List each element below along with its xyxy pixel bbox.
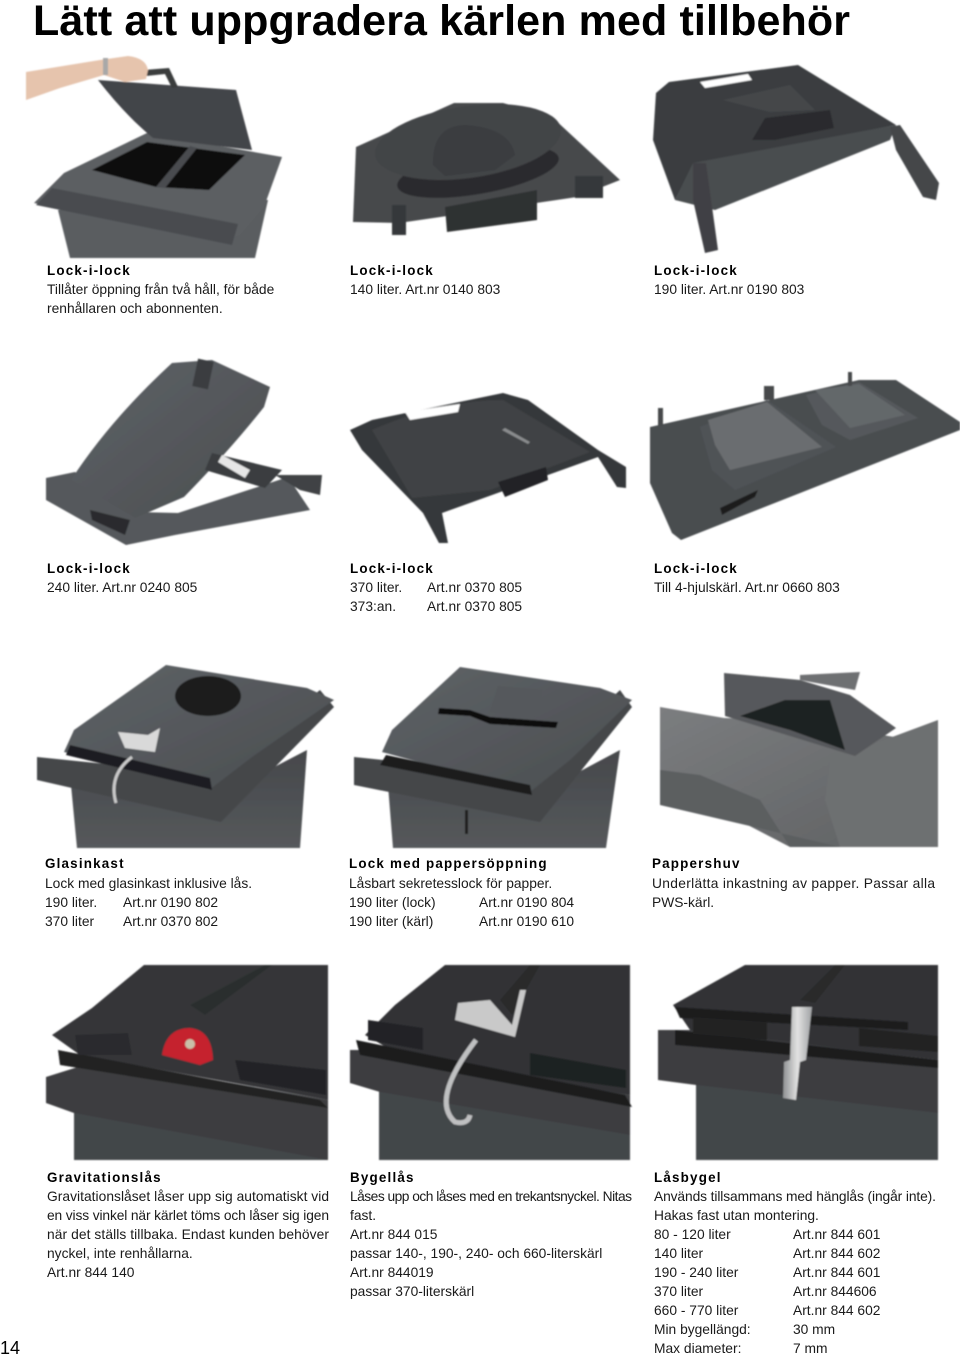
description: en viss vinkel när kärlet töms och låser sig igen: [47, 1208, 329, 1223]
description: 80 - 120 liter: [654, 1227, 731, 1242]
panel: Lock-i-lock 190 liter: [653, 65, 939, 297]
article numbers: Art.nr 0370 805: [427, 599, 522, 614]
description: 190 liter (kärl): [349, 914, 433, 929]
description: 190 liter.: [45, 895, 97, 910]
description: Tillåter öppning från två håll, för både: [47, 282, 275, 297]
description: passar 140-, 190-, 240- och 660-literskärl: [350, 1246, 602, 1261]
description: [350, 1189, 632, 1299]
heading: Lock-i-lock: [350, 263, 434, 278]
panel: Bygellås: [350, 965, 632, 1299]
description: Art.nr 0190 804: [479, 895, 574, 910]
photo: bin with glass inlet: [37, 665, 334, 848]
description: Art.nr 844 015: [350, 1227, 438, 1242]
description: nyckel, inte renhållarna.: [47, 1246, 193, 1261]
description: Art.nr 844 602: [793, 1246, 880, 1261]
heading: Gravitationslås: [47, 1170, 162, 1185]
article numbers: Art.nr 0370 805: [427, 580, 522, 595]
article number: 140 liter. Art.nr 0140 803: [350, 282, 501, 297]
description: Lock med glasinkast inklusive lås.: [45, 876, 252, 891]
description: 660 - 770 liter: [654, 1303, 739, 1318]
panel: Lock-i-lock two-way opening: [26, 56, 282, 316]
description: [654, 1189, 936, 1355]
photo: 140 liter lid: [353, 93, 620, 235]
description: 370 liter: [654, 1284, 703, 1299]
description: [349, 876, 574, 929]
photo: bin with shackle lock: [350, 965, 632, 1160]
description: [652, 876, 935, 910]
description: Art.nr 844 140: [47, 1265, 135, 1280]
heading: Låsbygel: [654, 1170, 722, 1185]
panel: Lock med pappersöppning: [349, 667, 632, 929]
description: 370 liter: [45, 914, 94, 929]
heading: Lock-i-lock: [47, 263, 131, 278]
panel: Låsbygel: [654, 965, 938, 1355]
heading: Lock-i-lock: [350, 561, 434, 576]
description: Hakas fast utan montering.: [654, 1208, 819, 1223]
panel: Lock-i-lock 240 liter: [46, 359, 322, 595]
photo: bin with open lid and arm: [26, 56, 282, 258]
description: 140 liter: [654, 1246, 703, 1261]
panel: Gravitationslås: [46, 965, 329, 1280]
description: Gravitationslåset låser upp sig automatiskt vid: [47, 1189, 329, 1204]
description: Används tillsammans med hänglås (ingår inte).: [654, 1189, 936, 1204]
description: 190 - 240 liter: [654, 1265, 739, 1280]
photo: paper hood: [660, 672, 938, 847]
description: Art.nr 844 602: [793, 1303, 880, 1318]
heading: Lock-i-lock: [654, 561, 738, 576]
description: [47, 282, 275, 316]
description: Underlätta inkastning av papper. Passar alla: [652, 876, 935, 891]
photo: four-wheel bin lid: [650, 372, 960, 540]
article numbers: 373:an.: [350, 599, 396, 614]
article number: 190 liter. Art.nr 0190 803: [654, 282, 805, 297]
photo: 190 liter lid: [653, 65, 939, 253]
photo: 240 liter lid, open: [46, 359, 322, 545]
photo: bin with red gravity lock: [46, 965, 328, 1160]
panel: Pappershuv: [652, 672, 938, 910]
description: Art.nr 844 601: [793, 1265, 880, 1280]
description: Art.nr 0190 610: [479, 914, 574, 929]
article numbers: [350, 580, 522, 614]
panel: Lock-i-lock 140 liter: [350, 93, 620, 297]
panel: Glasinkast: [37, 665, 334, 929]
description: Art.nr 844 601: [793, 1227, 880, 1242]
description: när det ställs tillbaka. Endast kunden behöver: [47, 1227, 329, 1242]
description: Art.nr 844606: [793, 1284, 877, 1299]
description: [47, 1189, 329, 1280]
description: 190 liter (lock): [349, 895, 436, 910]
panel: Lock-i-lock 4-wheel: [650, 372, 960, 595]
description: Min bygellängd:: [654, 1322, 751, 1337]
description: fast.: [350, 1208, 376, 1223]
panel: Lock-i-lock 370 liter: [350, 393, 626, 614]
heading: Lock-i-lock: [47, 561, 131, 576]
description: Art.nr 0190 802: [123, 895, 218, 910]
description: [45, 876, 252, 929]
photo: bin with lock bracket: [658, 965, 938, 1160]
photo: 370 liter lid: [350, 393, 626, 543]
heading: Lock med pappersöppning: [349, 856, 548, 871]
description: Art.nr 844019: [350, 1265, 434, 1280]
heading: Bygellås: [350, 1170, 415, 1185]
heading: Lock-i-lock: [654, 263, 738, 278]
description: PWS-kärl.: [652, 895, 714, 910]
article number: 240 liter. Art.nr 0240 805: [47, 580, 198, 595]
description: Låses upp och låses med en trekantsnyckel. Nitas: [350, 1189, 632, 1204]
heading: Glasinkast: [45, 856, 125, 871]
description: Låsbart sekretesslock för papper.: [349, 876, 552, 891]
article numbers: 370 liter.: [350, 580, 402, 595]
description: passar 370-literskärl: [350, 1284, 474, 1299]
photo: bin with paper slot: [354, 667, 632, 848]
article number: Till 4-hjulskärl. Art.nr 0660 803: [654, 580, 840, 595]
heading: Pappershuv: [652, 856, 741, 871]
description: renhållaren och abonnenten.: [47, 301, 223, 316]
description: Art.nr 0370 802: [123, 914, 218, 929]
description: 30 mm: [793, 1322, 835, 1337]
